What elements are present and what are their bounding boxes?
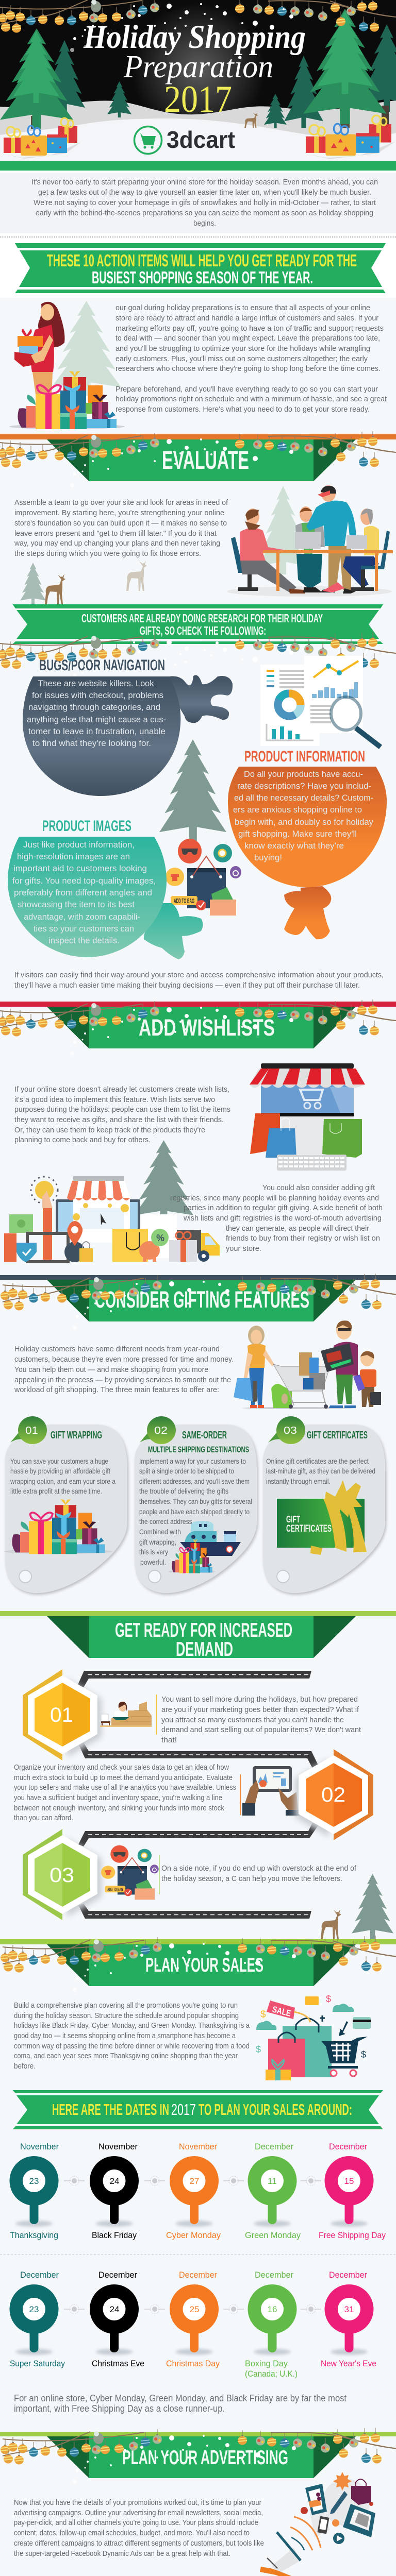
text block: gift registries: they can generate, as people will direct their	[226, 1224, 369, 1233]
text block: plan sales: holidays like Black Friday, Cyber Monday, and Green Monday. Thanksgiving is a	[14, 2021, 250, 2030]
panel: bugs: anything else that might cause a cus-	[27, 715, 166, 724]
card: same-order multiple shipping: this is very	[139, 1548, 168, 1556]
card: gift certificates: instantly through email.	[266, 1477, 331, 1485]
text block: plan sales: coma, and each year sees more Thanksgiving online shopping than the year	[14, 2052, 238, 2060]
hero scene	[0, 0, 396, 161]
green divider bar	[0, 161, 396, 171]
card: gift wrapping: 01	[25, 1425, 38, 1436]
icon: shopping bag group small	[101, 1845, 159, 1900]
date: green monday: Green Monday	[245, 2230, 301, 2240]
illustration: monitor store with bags	[250, 1063, 365, 1171]
text block: gifting: workload of gift shopping. The three main features to offer are:	[14, 1385, 219, 1394]
text block: goal	[116, 303, 387, 414]
scene: deer and tree	[321, 1874, 393, 1940]
step 03 hexagon	[23, 1829, 102, 1920]
text block: goal: store are ready to attract and handle a large influx of customers and sales. If your	[116, 314, 378, 323]
card: gift wrapping: little extra profit at the same time.	[10, 1487, 102, 1495]
date: boxing day: Boxing Day	[245, 2359, 288, 2368]
illustration: sale shopping: $	[326, 1994, 331, 2004]
card: same-order multiple shipping: the correct address.	[139, 1517, 194, 1526]
icon: deer	[244, 112, 258, 128]
text block: visitors: If visitors can easily find their way around your store and access comprehensive information about your products,	[14, 971, 384, 979]
icon: gift certificate: GIFT	[286, 1514, 300, 1524]
text block: step 02	[14, 1763, 236, 1822]
panel: intro: begins.	[193, 219, 216, 228]
dates row one	[9, 2142, 386, 2240]
card: gift wrapping: hassle by providing an affordable gift	[10, 1467, 110, 1475]
banner: dates: 2017	[171, 2100, 196, 2119]
panel: bugs: to find what they're looking for.	[32, 739, 151, 748]
text block: goal: early customers. Plus, you'll miss out on some customers altogether; the early	[116, 354, 368, 363]
panel: bugs	[23, 675, 233, 796]
text block: wishlists: If your online store doesn't already let customers create wish lists,	[14, 1085, 229, 1094]
panel: product images: preferably from different angles and	[14, 888, 152, 897]
date: free shipping day: December	[329, 2142, 367, 2151]
illustration: sale shopping: $	[256, 2044, 261, 2055]
panel: product images: high-resolution images are an	[17, 852, 130, 861]
illustration: sale shopping: SALE	[271, 2004, 292, 2019]
date: christmas eve: December	[98, 2270, 137, 2280]
card: same-order multiple shipping: Combined with	[139, 1528, 181, 1536]
illustration: sale shopping: $	[361, 2049, 366, 2060]
heading: bugs poor navigation: BUGS/POOR NAVIGATION	[39, 657, 165, 674]
text block: advertising: content, dates, follow-up email schedules, budget, and more. You'll also need to	[14, 2529, 250, 2537]
date: free shipping day	[319, 2142, 386, 2240]
panel: bugs: These are website killers. Look	[38, 679, 154, 688]
card: same-order multiple shipping: gift wrapping,	[139, 1538, 176, 1546]
banner: customers research	[12, 604, 383, 644]
date: cyber monday: November	[179, 2142, 217, 2151]
date: super saturday: 23	[29, 2304, 39, 2314]
date: new year's eve: December	[329, 2270, 367, 2280]
text block: gifting: You can help them out — and make shopping from you more	[14, 1365, 208, 1374]
card: same-order multiple shipping	[135, 1416, 258, 1595]
date: christmas eve	[90, 2270, 144, 2368]
banner: add wishlists	[0, 1002, 396, 1048]
text block: step 01: You want to sell more during the holidays, but how prepared	[161, 1695, 358, 1704]
date: boxing day	[245, 2270, 298, 2379]
text block: step 03	[159, 1855, 357, 1894]
card: gift wrapping	[4, 1416, 128, 1595]
logo: 3dcart	[134, 126, 235, 154]
date: black friday: November	[98, 2142, 138, 2151]
text block: advertising: pay-per-click, and all other channels you're going to use. Your plans should include	[14, 2518, 258, 2527]
title	[83, 19, 306, 121]
banner: get ready for increased demand	[0, 1611, 396, 1660]
date: super saturday: December	[20, 2270, 59, 2280]
date: boxing day: (Canada; U.K.)	[245, 2369, 298, 2379]
date: cyber monday: Cyber Monday	[166, 2230, 221, 2240]
card: same-order multiple shipping: different addresses, and you'll save them	[139, 1477, 250, 1485]
banner: plan your sales	[0, 1939, 396, 1986]
banner: evaluate: EVALUATE	[162, 446, 249, 474]
string lights hero	[0, 0, 396, 52]
text block: evaluate: store's foundation so you can build upon it — it makes no sense to	[14, 519, 227, 528]
date: cyber monday	[166, 2142, 221, 2240]
text block: step 01: you attract so many customers that you can't handle the	[161, 1716, 344, 1724]
panel: product information: buying!	[254, 853, 282, 862]
icon: shopping bag group	[166, 839, 241, 916]
text block: wishlists	[14, 1085, 230, 1144]
panel: product information: begin with, and doubly so for holiday	[235, 818, 374, 827]
text block: plan sales: Build a comprehensive plan covering all the promotions you're going to run	[14, 2001, 238, 2010]
text block: wishlists: purposes during the holidays: people can use them to list the items	[14, 1105, 230, 1114]
illustration: online store collage: %	[156, 1233, 164, 1243]
text block: gifting: Holiday customers have some different needs from year-round	[14, 1345, 220, 1353]
date: thanksgiving: 23	[29, 2176, 39, 2186]
step 03 hexagon: 03	[50, 1864, 74, 1887]
panel: product information: Do all your products have accu-	[244, 770, 363, 779]
text block: step 02: your top sellers and make use of all the analytics you have available. Unless	[14, 1783, 236, 1792]
date: christmas eve: Christmas Eve	[92, 2359, 144, 2368]
date: super saturday	[9, 2270, 65, 2368]
panel: bugs: navigating through categories, and	[28, 703, 160, 712]
text block: wishlists: it's a good idea to implement this feature. Wish lists serve two	[14, 1095, 215, 1104]
text block: step 02: much extra stock to build up to meet the demand you anticipate. Evaluate	[14, 1773, 233, 1782]
banner: get ready for increased demand: GET READY FOR INCREASED	[115, 1619, 292, 1641]
date: boxing day: December	[255, 2270, 293, 2280]
step 01 hexagon	[23, 1669, 102, 1760]
card: gift certificates: Online gift certificates are the perfect	[266, 1457, 369, 1465]
date: thanksgiving	[9, 2142, 59, 2240]
date: christmas day: Christmas Day	[166, 2359, 220, 2368]
text block: goal: response from customers. Here's what you need to do to get your store ready.	[116, 405, 370, 414]
text block: plan sales: good day too — it seems shopping online from a smartphone has become a	[14, 2031, 236, 2040]
icon: gift certificate: CERTIFICATES	[286, 1523, 332, 1534]
panel: product images	[8, 837, 203, 959]
panel: intro	[0, 173, 396, 233]
scene: grey tree	[134, 1140, 193, 1223]
text block: goal: and you'll be struggling to optimize your store for the holidays while wrangling	[116, 344, 370, 353]
text block: wishlists: planning to come back and buy for others.	[14, 1136, 151, 1144]
text block: gifting: customers, because they're even more pressed for time and money.	[14, 1355, 234, 1364]
date: green monday: December	[255, 2142, 293, 2151]
text block: step 03: On a side note, if you do end up with overstock at the end of	[161, 1864, 357, 1873]
panel: intro: It's never too early to start preparing your online store for the holiday season. Even months ahead, you can	[31, 178, 378, 187]
illustration: sale shopping	[256, 1994, 371, 2080]
illustration: report with magnifier	[260, 656, 381, 747]
card: same-order multiple shipping: the trouble of delivering the gifts	[139, 1487, 228, 1495]
banner: get ready for increased demand: DEMAND	[176, 1638, 233, 1660]
text block: advertising: Now that you have the details of your promotions worked out, it's time to plan your	[14, 2498, 261, 2507]
text block: step 01: are you if your marketing goes better than expected? What if	[161, 1705, 359, 1714]
heading: product images: PRODUCT IMAGES	[42, 818, 131, 835]
text block: key dates	[14, 2393, 346, 2414]
panel: product images: ties so your customers can	[34, 924, 134, 934]
date: christmas day: 25	[190, 2304, 199, 2314]
card: gift wrapping: GIFT WRAPPING	[51, 1430, 102, 1441]
panel: intro: early with the behind-the-scenes preparations so you can seize the moment as soon as holiday shopping	[36, 209, 373, 217]
text block: visitors	[14, 971, 384, 990]
text block: gift registries: You could also consider adding gift	[262, 1183, 375, 1192]
text block: gift registries: registries, since many people will be planning holiday events and	[170, 1194, 379, 1202]
banner: add wishlists: ADD WISHLISTS	[139, 1014, 275, 1041]
text block: evaluate: leave errors present and "get to them till later." If you do it that	[14, 529, 217, 538]
card: same-order multiple shipping: split a single order to be shipped to	[139, 1467, 234, 1475]
illustration: megaphone with media icons	[260, 2472, 375, 2576]
panel: product images: Just like product information,	[23, 840, 135, 850]
icon: gifts right	[303, 115, 395, 159]
date: new year's eve: New Year's Eve	[321, 2359, 376, 2368]
text block: gift registries: your store.	[226, 1244, 261, 1253]
step 01 hexagon: 01	[50, 1704, 73, 1726]
text block: step 02: than you can afford.	[14, 1814, 73, 1822]
string lights evaluate	[0, 431, 396, 487]
date: new year's eve: 31	[344, 2304, 354, 2314]
date: christmas day: December	[179, 2270, 217, 2280]
panel: product information: ers are anxious shopping online to	[233, 805, 362, 815]
text block: plan sales: common way of passing the time before dinner or while recovering from a food	[14, 2042, 250, 2050]
date: christmas eve: 24	[110, 2304, 119, 2314]
date: thanksgiving: Thanksgiving	[10, 2230, 58, 2240]
banner: consider gifting features	[0, 1275, 396, 1321]
string lights sales	[1, 1936, 396, 1992]
text block: evaluate: improvement. By starting here, you're strengthening your online	[14, 509, 224, 517]
card: gift certificates: 03	[284, 1425, 297, 1436]
text block: step 01	[156, 1694, 361, 1744]
card: same-order multiple shipping: SAME-ORDER	[182, 1430, 227, 1441]
panel: intro: We're not saying to cover your homepage in gifs of snowflakes and holly in mid-October — rather, to start	[34, 198, 376, 207]
text block: advertising: create different campaigns to attract different segments of customers, but tools like	[14, 2539, 264, 2548]
banner: dates: HERE ARE THE DATES IN	[52, 2100, 169, 2119]
illustration: team at table	[227, 485, 393, 597]
text block: step 02: you have a sufficient budget and inventory space, you're walking a line	[14, 1793, 222, 1802]
title: 2017	[164, 78, 232, 121]
text block: plan sales: during the holiday season. Structure the schedule around popular shopping	[14, 2011, 239, 2020]
text block: wishlists: they want to receive as gifts, and share the list with their friends.	[14, 1115, 224, 1124]
date: black friday: 24	[110, 2176, 119, 2186]
title: Preparation	[123, 49, 273, 84]
card: same-order multiple shipping: 02	[154, 1425, 168, 1436]
text block: key dates: important, with Free Shipping Day as a close runner-up.	[14, 2403, 225, 2414]
text block: goal: to deal with — and sooner than you might expect. Leave the preparations too late,	[116, 334, 380, 343]
card: same-order multiple shipping: themselves. They can buy gifts for several	[139, 1497, 252, 1505]
text block: gifting: appealing in the process — by providing services to smooth out the	[14, 1376, 231, 1384]
text block: plan sales	[14, 2001, 250, 2071]
date: cyber monday: 27	[190, 2176, 199, 2186]
card: gift wrapping: wrapping option, and earn your store a	[10, 1477, 116, 1485]
illustration: girl on boxes	[100, 1702, 152, 1727]
icon: gift certificate	[277, 1480, 367, 1555]
text block: gift registries: wish lists and gift registries is the word-of-mouth advertising	[183, 1214, 382, 1223]
string lights wishlists	[0, 999, 396, 1056]
step 02 hexagon	[295, 1749, 373, 1840]
date: black friday: Black Friday	[92, 2230, 137, 2240]
icon: gifts left	[2, 118, 81, 159]
date: free shipping day: 15	[344, 2176, 354, 2186]
road timeline	[77, 1671, 319, 1919]
panel: product information: rate descriptions? Have you includ-	[237, 782, 371, 791]
panel: product information: know exactly what they're	[244, 841, 344, 851]
text block: gift registries: parties in addition to regular gift giving. A side benefit of both	[184, 1204, 383, 1212]
panel: bugs: tomer to leave in frustration, unable	[28, 727, 166, 736]
banner: plan your sales: PLAN YOUR SALES	[145, 1954, 263, 1976]
panel: bugs: for issues with checkout, problems	[32, 691, 163, 700]
banner: action items	[15, 243, 386, 293]
card: same-order multiple shipping: powerful.	[140, 1558, 166, 1566]
panel: product information: gift shopping. Make sure they'll	[238, 829, 357, 839]
illustration: tablet with hands	[240, 1766, 300, 1816]
text block: goal: our goal during holiday preparations is to ensure that all aspects of your online	[116, 303, 370, 312]
step 02 hexagon: 02	[321, 1784, 345, 1806]
panel: product images: important aid to customers looking	[13, 864, 147, 873]
string lights advertising	[1, 2428, 396, 2484]
card: gift certificates	[263, 1416, 386, 1595]
card: gift wrapping: You can save your customers a huge	[10, 1457, 108, 1465]
text block: goal: researchers who choose where they're going to shop long before the time comes.	[116, 364, 381, 373]
illustration: sale shopping: $	[260, 2009, 266, 2020]
string lights customers	[0, 632, 396, 688]
date: thanksgiving: November	[20, 2142, 59, 2151]
card: gift certificates: last-minute gift, as they can be delivered	[266, 1467, 375, 1475]
banner: customers research: GIFTS, SO CHECK THE FOLLOWING:	[140, 624, 266, 637]
icon: gift stack	[9, 371, 125, 429]
date: green monday: 11	[268, 2176, 277, 2186]
text block: goal: holiday promotions right on schedule and with a minimum of hassle, and see a great	[116, 395, 387, 403]
banner: plan your advertising: PLAN YOUR ADVERTISING	[122, 2447, 288, 2469]
date: boxing day: 16	[268, 2304, 277, 2314]
date: christmas day	[166, 2270, 220, 2368]
logo: 3dcart: 3dcart	[167, 126, 235, 153]
text block: wishlists: Or, they can use them to keep track of the products they're	[14, 1126, 205, 1134]
title: Holiday Shopping	[83, 19, 306, 56]
text block: advertising	[14, 2498, 264, 2558]
panel: product images: for gifts. You need top-quality images,	[12, 876, 156, 886]
scene: grey tree	[159, 739, 226, 841]
text block: advertising: the super-targeted Facebook Dynamic Ads can be a great help with that.	[14, 2549, 230, 2558]
date: new year's eve	[321, 2270, 376, 2368]
scene: tree and deer	[20, 561, 147, 604]
text block: evaluate	[14, 498, 228, 558]
text block: gift registries	[170, 1183, 383, 1253]
text block: gift registries: friends to buy from their registry or wish list on	[226, 1234, 380, 1243]
text block: step 03: the holiday season, a C can help you move the leftovers.	[161, 1874, 342, 1883]
text block: visitors: they'll have a much easier time making their buying decisions — even if they put off their purchase till later.	[14, 981, 360, 990]
date: free shipping day: Free Shipping Day	[319, 2230, 386, 2240]
text block: goal: marketing efforts pay off, you're going to have a ton of traffic and support requests	[116, 324, 384, 333]
card: same-order multiple shipping: MULTIPLE SHIPPING DESTINATIONS	[148, 1445, 249, 1454]
dates row two	[9, 2270, 376, 2379]
text block: step 01: demand and start selling out of popular items? We don't want	[161, 1725, 361, 1734]
banner: evaluate	[0, 434, 396, 481]
text block: plan sales: before.	[14, 2062, 36, 2071]
string lights gifting	[1, 1274, 396, 1330]
card: same-order multiple shipping: Implement a way for your customers to	[139, 1457, 246, 1465]
panel: product images: showcasing the item to its best	[18, 900, 135, 909]
text block: evaluate: Assemble a team to go over your site and look for areas in need of	[14, 498, 228, 507]
date: black friday	[90, 2142, 139, 2240]
text block: step 01: that!	[161, 1736, 177, 1744]
text block: gifting	[14, 1345, 234, 1394]
panel: product images: advantage, with zoom capabili-	[24, 912, 140, 922]
text block: step 02: Organize your inventory and check your sales data to get an idea of how	[14, 1763, 229, 1772]
date: super saturday: Super Saturday	[10, 2359, 65, 2368]
panel: intro: get a few tasks out of the way to give yourself an easier time later on, when you'll likely be much busier.	[38, 188, 371, 197]
illustration: online store collage	[4, 1176, 220, 1262]
text block: goal: Prepare beforehand, and you'll have everything ready to go so you can start your	[116, 385, 378, 394]
panel: product information: ed all the necessary details? Custom-	[234, 793, 373, 803]
date: green monday	[245, 2142, 301, 2240]
text block: key dates: For an online store, Cyber Monday, Green Monday, and Black Friday are by far the most	[14, 2393, 346, 2403]
illustration: woman with gifts	[9, 301, 125, 429]
card: same-order multiple shipping: people and have each shipped directly to	[139, 1507, 250, 1516]
text block: evaluate: way, you may end up changing your plans and then never taking	[14, 539, 220, 548]
illustration: family shopping	[234, 1320, 396, 1409]
text block: evaluate: the steps during which you were going to fix those errors.	[14, 549, 201, 558]
icon: ship	[180, 1521, 241, 1556]
banner: plan your advertising	[0, 2432, 396, 2478]
panel: product images: inspect the details.	[48, 936, 120, 945]
banner: dates	[12, 2090, 383, 2129]
text block: advertising: advertising campaigns. Outline your advertising for email newsletters, social media,	[14, 2509, 263, 2517]
text block: step 02: between not enough inventory, and sinking your funds into more stock	[14, 1804, 224, 1812]
panel: product information	[228, 767, 387, 939]
